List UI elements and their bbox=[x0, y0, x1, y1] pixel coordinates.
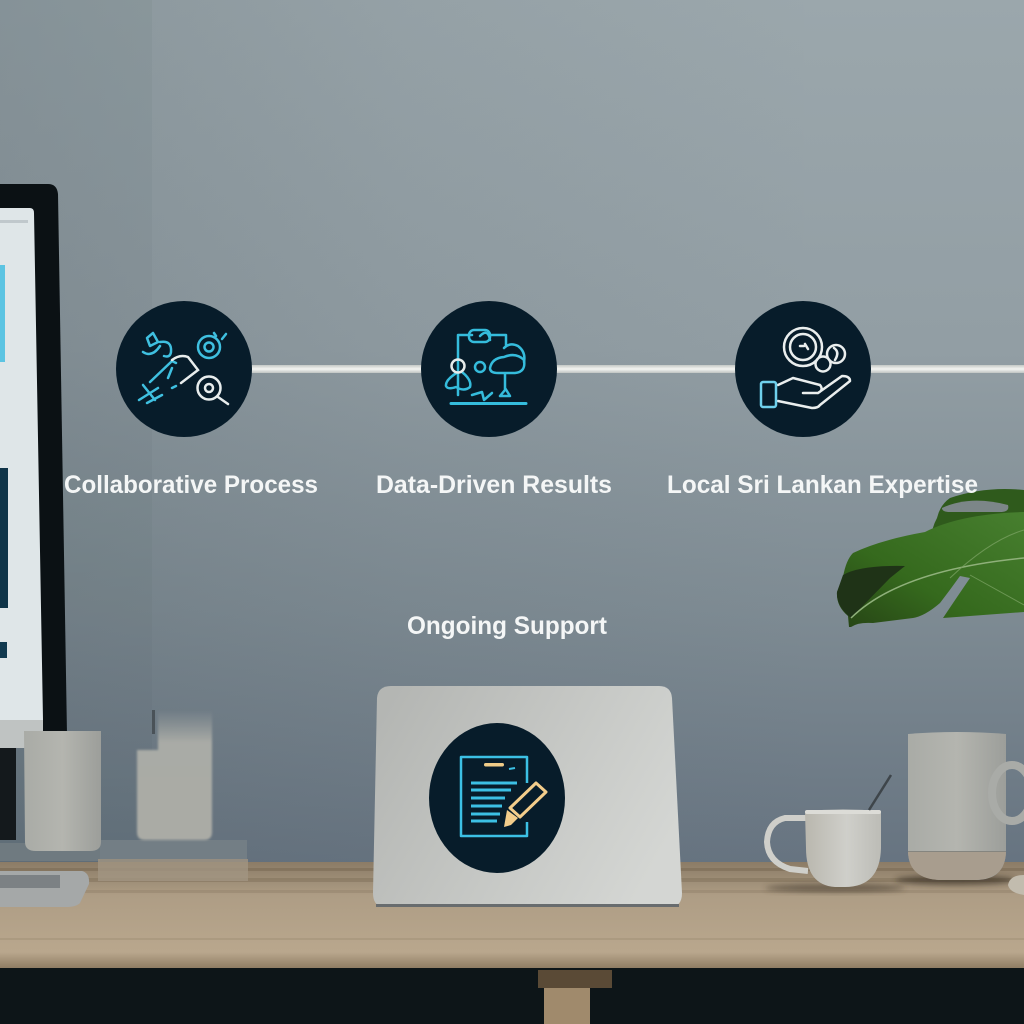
connector line bbox=[250, 365, 1024, 373]
cylinder vase: blurred bbox=[137, 710, 212, 840]
small mug bbox=[765, 775, 905, 892]
wooden desk bbox=[0, 862, 1024, 968]
label: data-driven results: Data-Driven Results bbox=[376, 471, 612, 499]
shelf under cylinders bbox=[0, 840, 248, 881]
label: local sri lankan expertise: Local Sri Lankan Expertise bbox=[667, 471, 978, 499]
plant leaves bbox=[837, 489, 1024, 627]
large mug bbox=[895, 732, 1024, 895]
icon: ongoing support document bbox=[429, 723, 565, 873]
label: collaborative process: Collaborative Process bbox=[64, 471, 318, 499]
icon: local sri lankan expertise bbox=[735, 301, 871, 437]
label: ongoing support: Ongoing Support bbox=[407, 612, 608, 640]
cylinder vase: left bbox=[24, 731, 101, 851]
laptop bbox=[373, 686, 682, 907]
keyboard bbox=[0, 871, 89, 907]
icon: collaborative process bbox=[116, 301, 252, 437]
icon: data-driven results bbox=[421, 301, 557, 437]
dark floor and desk leg bbox=[0, 968, 1024, 1024]
monitor bbox=[0, 184, 67, 840]
